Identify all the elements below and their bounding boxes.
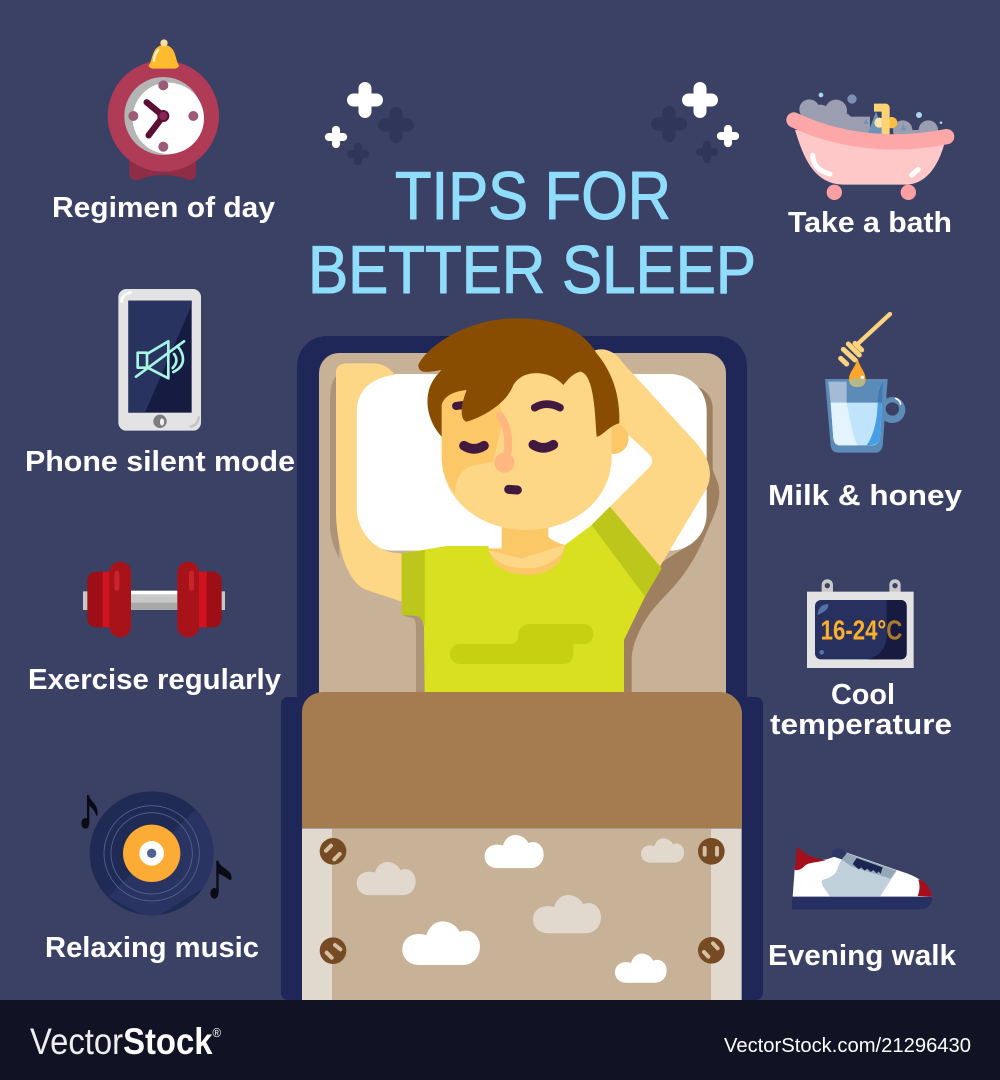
buttons bbox=[320, 838, 725, 964]
icon: dumbbell bbox=[83, 562, 225, 637]
title bbox=[308, 158, 756, 308]
mattress bbox=[319, 353, 726, 733]
decorative stars bbox=[329, 88, 735, 161]
ear bbox=[598, 423, 629, 454]
mouth bbox=[509, 476, 517, 503]
title: BETTER SLEEP bbox=[308, 232, 756, 308]
label: milk and honey: Milk & honey bbox=[768, 480, 962, 512]
pillow bbox=[357, 374, 707, 551]
left arm bbox=[336, 363, 402, 602]
label: exercise regularly: Exercise regularly bbox=[28, 664, 281, 696]
bed frame bbox=[281, 336, 763, 1000]
icon: bathtub bbox=[794, 93, 947, 200]
footer url: VectorStock.com/21296430 bbox=[724, 1035, 971, 1057]
label: cool temperature bbox=[770, 679, 952, 741]
shirt blotch bbox=[450, 624, 593, 664]
icon: sneaker bbox=[792, 847, 932, 909]
shirt bbox=[402, 507, 662, 693]
hair bbox=[418, 318, 619, 437]
label: take a bath: Take a bath bbox=[788, 207, 952, 239]
clouds bbox=[357, 835, 684, 983]
title: TIPS FOR bbox=[395, 158, 671, 234]
shirt shading bbox=[402, 507, 662, 627]
neck and collar bbox=[488, 523, 565, 575]
label: regimen of day: Regimen of day bbox=[52, 192, 275, 224]
label: relaxing music: Relaxing music bbox=[45, 932, 259, 964]
icon: phone silent mode bbox=[118, 289, 201, 431]
blanket bbox=[302, 692, 742, 828]
face shadow bbox=[442, 383, 503, 494]
face bbox=[442, 367, 612, 530]
icon: thermometer display bbox=[807, 579, 914, 668]
icon: vinyl record with notes bbox=[81, 791, 232, 920]
right arm bbox=[592, 349, 710, 567]
character: sleeping boy bbox=[330, 318, 719, 693]
nose bbox=[494, 416, 514, 473]
label: phone silent mode: Phone silent mode bbox=[25, 446, 295, 478]
sheet bbox=[302, 828, 742, 1000]
label: cool temperature: temperature bbox=[770, 709, 952, 741]
logo: VectorStock: VectorStock bbox=[30, 1021, 224, 1062]
footer bar bbox=[0, 1000, 1000, 1080]
icon: alarm clock bbox=[108, 39, 219, 180]
eyes and brows bbox=[456, 404, 560, 449]
label: cool temperature: Cool bbox=[831, 679, 895, 711]
label: evening walk: Evening walk bbox=[768, 940, 957, 972]
icon: thermometer display: 16-24°C bbox=[821, 614, 902, 645]
logo: VectorStock: ® bbox=[212, 1025, 221, 1040]
shadows bbox=[330, 377, 719, 693]
icon: milk and honey cup bbox=[825, 314, 905, 453]
panel: bed with sleeping boy bbox=[281, 318, 763, 1000]
